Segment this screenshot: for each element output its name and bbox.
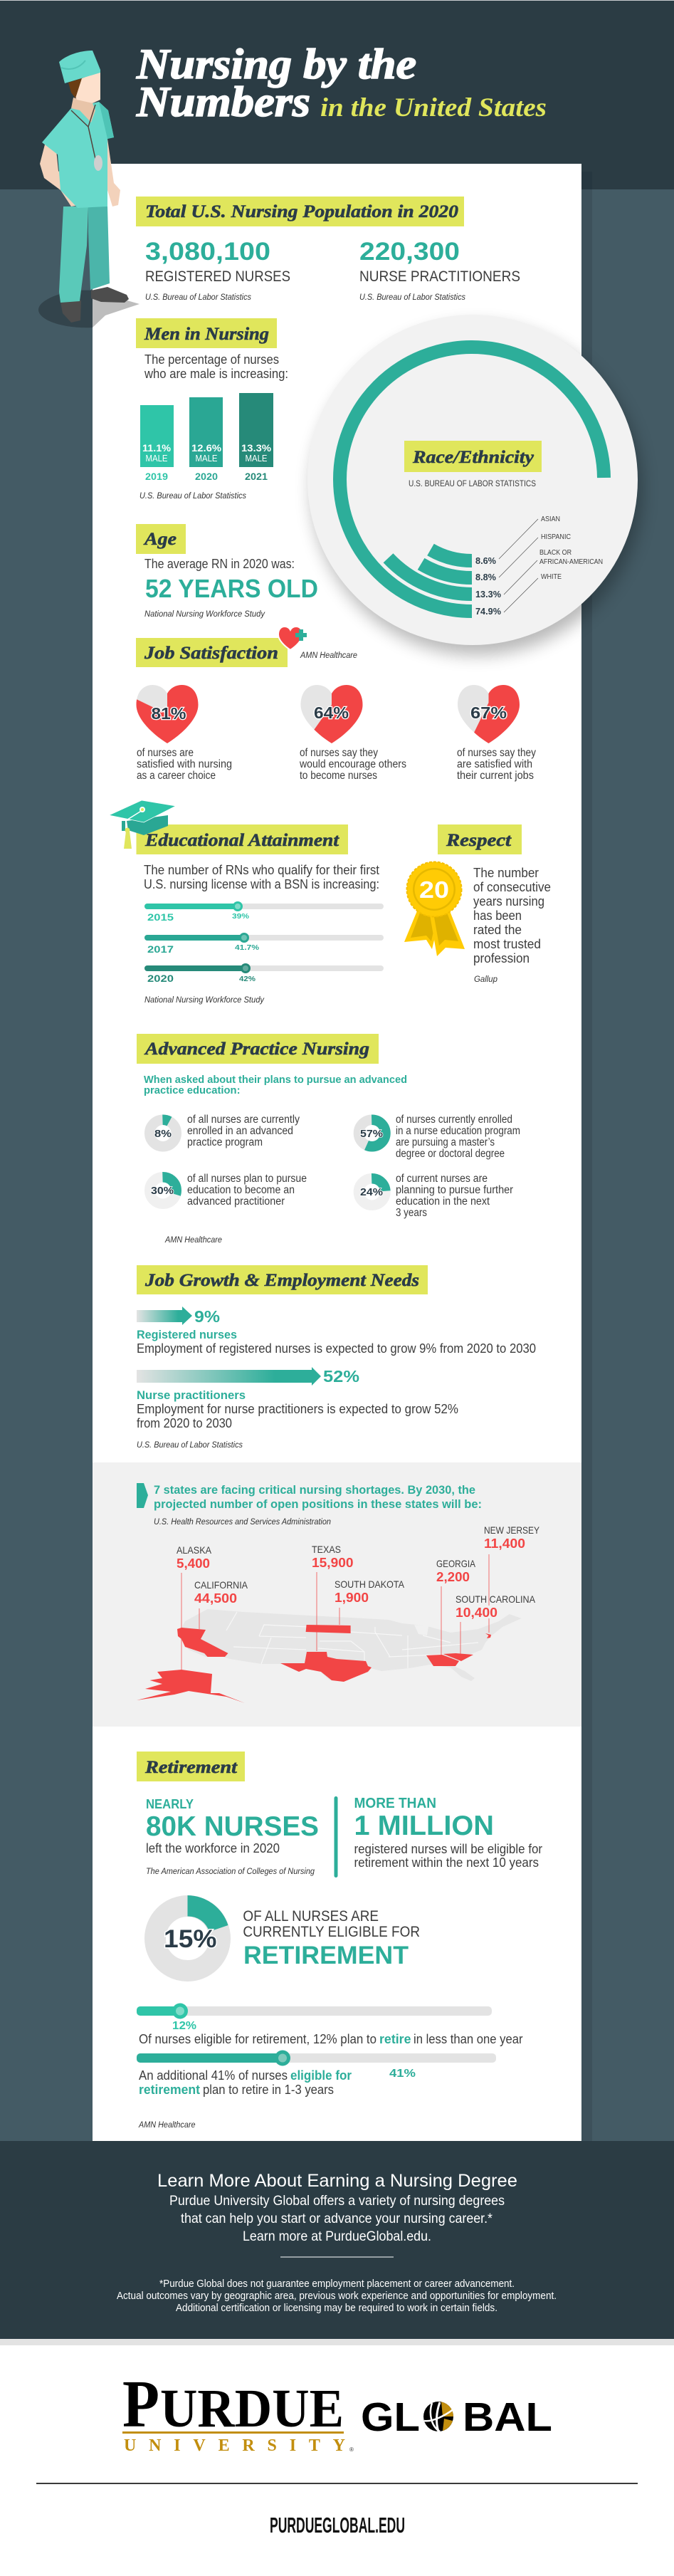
text: advanced practice intro: [144, 1074, 407, 1096]
text: eligible for retirement: RETIREMENT: [243, 1942, 409, 1969]
legend: ethnicity values and leaders: AFRICAN-AMERICAN: [539, 558, 603, 566]
section: state shortages map: [93, 1462, 581, 1727]
text: website url: PURDUEGLOBAL.EDU: [270, 2513, 405, 2538]
bar chart: male share: 2021: [245, 471, 268, 482]
donut: 57 percent: degree or doctoral degree: [396, 1148, 505, 1160]
heading: retirement: Retirement: [144, 1758, 238, 1777]
map: United States: [137, 1554, 522, 1703]
stat: registered nurses: 3,080,100: [145, 238, 270, 266]
source: shortages: U.S. Health Resources and Services Administration: [154, 1518, 331, 1527]
text: male percentage intro: who are male is increasing:: [144, 367, 288, 381]
labels: state values: TEXAS: [312, 1544, 341, 1555]
donut: 24 percent: [359, 1173, 513, 1219]
donut: 15 percent eligible: 15%: [164, 1925, 216, 1953]
heading: job growth: [137, 1265, 428, 1294]
text: shortage intro: [154, 1484, 482, 1511]
icon: nurse illustration: [38, 51, 139, 328]
arrow: 52 percent growth: 52%: [323, 1367, 359, 1386]
labels: state values: [177, 1524, 540, 1620]
bar chart: male share: MALE: [145, 454, 168, 464]
donut: 30 percent: education to become an: [187, 1184, 295, 1196]
stat: nurse practitioners: NURSE PRACTITIONERS: [359, 268, 520, 285]
logo: Purdue Global: GL: [361, 2394, 420, 2440]
labels: state values: SOUTH CAROLINA: [456, 1593, 536, 1605]
text: trusted profession: most trusted: [473, 937, 541, 951]
progress bar: 41 percent: 41%: [389, 2068, 416, 2080]
donut: 8 percent: [149, 1114, 300, 1148]
text: advanced practice intro: When asked about their plans to pursue an advanced: [144, 1074, 407, 1086]
text: advanced practice intro: practice education:: [144, 1084, 241, 1096]
labels: state values: 11,400: [484, 1536, 525, 1551]
source: respect: Gallup: [474, 975, 498, 984]
labels: state values: 15,900: [312, 1556, 353, 1570]
title: [136, 41, 547, 125]
stat: 1 million: MORE THAN: [354, 1796, 436, 1811]
text: registered nurses growth: [137, 1329, 536, 1356]
progress bar: 2017: [144, 933, 384, 955]
stat: 80K nurses: NEARLY: [146, 1797, 194, 1811]
logo: Purdue Global: ®: [349, 2446, 354, 2453]
donut: 24 percent: planning to pursue further: [396, 1184, 513, 1196]
stat: heart 81 percent: 81%: [151, 704, 186, 723]
text: trusted profession: of consecutive: [473, 880, 551, 894]
icon: chevron: [137, 1483, 148, 1508]
text: 12 percent retire: [139, 2032, 523, 2046]
legend: ethnicity values and leaders: WHITE: [541, 573, 562, 581]
section: age: [136, 524, 318, 619]
text: eligible for retirement: OF ALL NURSES ARE: [243, 1908, 379, 1925]
state: Texas: [280, 1652, 372, 1682]
icon: globe letter: [423, 2402, 453, 2431]
stat: registered nurses: U.S. Bureau of Labor Statistics: [145, 293, 251, 302]
stat: registered nurses: REGISTERED NURSES: [145, 268, 290, 285]
text: eligible for retirement: [243, 1908, 420, 1969]
panel: footer call to action: [0, 2141, 674, 2345]
donut: 30 percent: [149, 1173, 307, 1208]
stat: heart 81 percent: as a career choice: [137, 770, 216, 782]
text: disclaimer: Actual outcomes vary by geographic area, previous work experience and opportunities for employment.: [117, 2290, 557, 2302]
heading: job satisfaction: Job Satisfaction: [144, 644, 278, 663]
legend: ethnicity values and leaders: 8.8%: [475, 572, 496, 582]
heading: job satisfaction: [136, 638, 288, 667]
icon: award ribbon: [404, 862, 465, 956]
text: 41 percent retire: plan to retire in 1-3 years: [203, 2083, 334, 2097]
text: average age: The average RN in 2020 was:: [144, 557, 295, 571]
source: race ethnicity: U.S. BUREAU OF LABOR STATISTICS: [409, 480, 536, 488]
text: BSN intro: The number of RNs who qualify for their first: [144, 863, 379, 877]
donut: 15 percent eligible: [155, 1895, 228, 1971]
text: trusted profession: rated the: [473, 923, 522, 937]
bar chart: male share: [140, 393, 273, 482]
donut: 8 percent: enrolled in an advanced: [187, 1125, 293, 1137]
donut: 30 percent: 30%: [151, 1185, 174, 1197]
donut: 57 percent: 57%: [360, 1128, 383, 1140]
text: trusted profession: profession: [473, 951, 530, 965]
arrow: 52 percent growth: [137, 1367, 359, 1386]
source: job growth: U.S. Bureau of Labor Statistics: [137, 1441, 243, 1450]
labels: state values: 5,400: [177, 1556, 210, 1571]
donut: 57 percent: of nurses currently enrolled: [396, 1114, 512, 1126]
stat: heart 64 percent: would encourage others: [299, 758, 406, 770]
stat: heart 64 percent: of nurses say they: [300, 747, 378, 759]
section: advanced practice nursing: [137, 1034, 520, 1245]
legend: ethnicity values and leaders: [475, 515, 603, 617]
progress bar: 2017: 2017: [147, 943, 174, 955]
stat: heart 67 percent: [457, 681, 536, 782]
state: New Jersey: [485, 1633, 491, 1638]
stat: 52 years old: 52 YEARS OLD: [145, 574, 318, 603]
text: degrees pitch: Purdue University Global offers a variety of nursing degrees: [169, 2194, 505, 2209]
panel: main white sheet: [93, 164, 581, 2141]
state: South Dakota: [306, 1625, 351, 1633]
section: total nursing population: [136, 197, 520, 302]
progress bar: 12 percent: 12%: [172, 2020, 196, 2032]
text: degrees pitch: [169, 2194, 505, 2244]
text: 41 percent retire: [139, 2068, 352, 2097]
logo: Purdue Global: [122, 2367, 552, 2455]
bar chart: male share: 2020: [195, 471, 218, 482]
text: eligible for retirement: CURRENTLY ELIGIBLE FOR: [243, 1924, 420, 1940]
donut: 8 percent: of all nurses are currently: [187, 1114, 300, 1126]
heading: learn more: Learn More About Earning a Nursing Degree: [157, 2171, 517, 2191]
text: shortage intro: 7 states are facing critical nursing shortages. By 2030, the: [154, 1484, 475, 1497]
stat: heart 64 percent: to become nurses: [300, 770, 377, 782]
bar chart: male share: MALE: [245, 454, 268, 464]
text: disclaimer: [117, 2278, 557, 2314]
stat: heart 67 percent: are satisfied with: [457, 758, 532, 770]
bar chart: male share: 11.1%: [142, 442, 172, 454]
text: trusted profession: The number: [473, 866, 539, 880]
stat: nurse practitioners: U.S. Bureau of Labor Statistics: [359, 293, 465, 302]
labels: state values: CALIFORNIA: [194, 1579, 248, 1591]
bar chart: male share: 12.6%: [191, 442, 222, 454]
stat: 80K nurses: left the workforce in 2020: [146, 1841, 280, 1855]
heading: respect: Respect: [446, 831, 512, 850]
progress bar: 2015: 2015: [147, 911, 174, 923]
heading: educational attainment: Educational Attainment: [144, 831, 339, 850]
donut: 30 percent: of all nurses plan to pursue: [187, 1173, 307, 1185]
donut: 8 percent: 8%: [154, 1128, 172, 1140]
state: South Carolina: [443, 1653, 473, 1661]
heading: advanced practice nursing: Advanced Practice Nursing: [144, 1040, 369, 1059]
stat: 80K nurses: [146, 1797, 319, 1876]
section: job satisfaction: [130, 627, 536, 782]
stat: heart 81 percent: satisfied with nursing: [137, 758, 232, 770]
leader lines: [181, 1554, 489, 1670]
text: 12 percent retire: Of nurses eligible for retirement, 12% plan to: [139, 2032, 377, 2046]
bar chart: male share: 2019: [145, 471, 168, 482]
legend: ethnicity values and leaders: 74.9%: [475, 607, 501, 617]
text: registered nurses growth: Employment of registered nurses is expected to grow 9% from 2020 to 2030: [137, 1341, 536, 1356]
text: 12 percent retire: in less than one year: [414, 2032, 523, 2046]
progress bar: 2017: 41.7%: [235, 943, 260, 952]
logo: Purdue Global: P: [122, 2367, 159, 2441]
logo: Purdue Global: BAL: [463, 2394, 552, 2440]
text: disclaimer: Additional certification or licensing may be required to work in certain fields.: [176, 2303, 497, 2314]
stat: 1 million: retirement within the next 10 years: [354, 1855, 539, 1870]
progress bar: 2020: 42%: [239, 975, 256, 983]
heading: race ethnicity: [404, 441, 542, 472]
text: degrees pitch: that can help you start or advance your nursing career.*: [181, 2211, 493, 2226]
text: trusted profession: years nursing: [473, 894, 544, 909]
title: in the United States: [320, 93, 547, 122]
source: job satisfaction: AMN Healthcare: [300, 651, 357, 660]
stat: heart 64 percent: 64%: [314, 703, 349, 722]
donut: 30 percent: advanced practitioner: [187, 1195, 285, 1208]
donut: 24 percent: 3 years: [396, 1207, 427, 1219]
source: advanced practice: AMN Healthcare: [164, 1236, 222, 1245]
logo: Purdue Global: UNIVERSITY: [124, 2436, 345, 2455]
bar chart: male share: 13.3%: [241, 442, 272, 454]
labels: state values: 1,900: [335, 1591, 369, 1605]
stat: heart 81 percent: of nurses are: [137, 747, 194, 759]
stat: 1 million: 1 MILLION: [354, 1811, 494, 1841]
state: California: [177, 1628, 228, 1657]
stat: heart 67 percent: of nurses say they: [457, 747, 536, 759]
stat: 80K nurses: 80K NURSES: [146, 1811, 319, 1842]
section: respect: [404, 824, 551, 984]
heading: age: [136, 524, 186, 554]
stat: 1 million: registered nurses will be eligible for: [354, 1842, 542, 1856]
text: 41 percent retire: eligible for: [290, 2068, 352, 2083]
text: trusted profession: [473, 866, 551, 965]
stat: heart 67 percent: their current jobs: [457, 770, 534, 782]
legend: ethnicity values and leaders: ASIAN: [541, 515, 560, 523]
text: disclaimer: *Purdue Global does not guarantee employment placement or career advancement.: [159, 2278, 515, 2290]
heading: race ethnicity: Race/Ethnicity: [412, 448, 535, 467]
labels: state values: 44,500: [194, 1591, 237, 1606]
stat: heart 67 percent: 67%: [470, 703, 507, 722]
labels: state values: SOUTH DAKOTA: [335, 1578, 405, 1590]
logo: Purdue Global: URDUE: [160, 2379, 344, 2439]
progress bar: 2015: 39%: [232, 912, 250, 921]
icon: heart with plus: [278, 627, 307, 650]
state: Georgia: [426, 1655, 459, 1666]
heading: total population: [136, 197, 464, 226]
heading: job growth: Job Growth & Employment Needs: [144, 1271, 419, 1290]
labels: state values: 10,400: [456, 1606, 497, 1620]
arrow: 9 percent growth: [137, 1307, 220, 1326]
text: BSN intro: [144, 863, 379, 891]
title: Numbers: [136, 78, 310, 125]
text: shortage intro: projected number of open positions in these states will be:: [154, 1498, 482, 1511]
heading: respect: [438, 824, 522, 854]
progress bar: 2020: 2020: [147, 973, 174, 984]
donut: 57 percent: [359, 1114, 520, 1160]
text: nurse practitioners growth: Employment for nurse practitioners is expected to grow 52%: [137, 1402, 458, 1416]
icon: award ribbon: 20: [419, 876, 449, 903]
legend: ethnicity values and leaders: 13.3%: [475, 590, 501, 600]
section: job growth: [137, 1265, 536, 1450]
section: race and ethnicity circle: [307, 315, 642, 655]
stat: registered nurses: [145, 238, 290, 302]
source: retirement: AMN Healthcare: [138, 2121, 195, 2130]
heading: age: Age: [143, 530, 177, 549]
source: education: National Nursing Workforce Study: [144, 996, 265, 1005]
donut: 57 percent: in a nurse education program: [396, 1125, 520, 1137]
legend: ethnicity values and leaders: BLACK OR: [539, 549, 572, 557]
text: 41 percent retire: retirement: [139, 2083, 200, 2097]
source: age: National Nursing Workforce Study: [144, 610, 265, 619]
text: nurse practitioners growth: from 2020 to 2030: [137, 1416, 232, 1430]
donut: 24 percent: 24%: [360, 1186, 383, 1198]
icon: graduation cap: [109, 800, 176, 849]
source: men in nursing: U.S. Bureau of Labor Statistics: [139, 492, 246, 501]
heading: educational attainment: [137, 824, 348, 854]
stat: 80K nurses: The American Association of Colleges of Nursing: [146, 1868, 315, 1876]
arrow: 9 percent growth: 9%: [194, 1307, 220, 1326]
text: male percentage intro: [144, 352, 288, 381]
progress bar: 12 percent: [137, 2004, 492, 2032]
text: trusted profession: has been: [473, 909, 522, 923]
progress bar: 2015: [144, 901, 384, 923]
heading: men in nursing: Men in Nursing: [144, 325, 269, 344]
section: men in nursing: [136, 318, 288, 501]
text: nurse practitioners growth: [137, 1389, 458, 1430]
stat: nurse practitioners: [359, 238, 520, 302]
progress bar: 2020: [144, 963, 384, 984]
donut: 57 percent: are pursuing a master’s: [396, 1136, 495, 1148]
state: Alaska: [137, 1670, 245, 1703]
stat: heart 81 percent: [137, 685, 232, 779]
heading: men in nursing: [136, 318, 277, 348]
stat: heart 64 percent: [299, 681, 406, 782]
bar chart: male share: MALE: [195, 454, 218, 464]
labels: state values: GEORGIA: [436, 1558, 476, 1569]
text: 41 percent retire: An additional 41% of nurses: [139, 2068, 288, 2083]
labels: state values: 2,200: [436, 1570, 470, 1584]
labels: state values: NEW JERSEY: [484, 1524, 540, 1536]
text: BSN intro: U.S. nursing license with a BSN is increasing:: [144, 877, 379, 891]
stat: 1 million: [354, 1796, 542, 1870]
legend: ethnicity values and leaders: 8.6%: [475, 556, 496, 566]
text: registered nurses growth: Registered nurses: [137, 1329, 237, 1341]
donut: 8 percent: practice program: [187, 1136, 263, 1148]
heading: total population: Total U.S. Nursing Population in 2020: [145, 202, 459, 221]
text: degrees pitch: Learn more at PurdueGlobal.edu.: [243, 2229, 431, 2244]
section: educational attainment: [109, 800, 384, 1005]
labels: state values: ALASKA: [177, 1544, 212, 1556]
chart: radial ethnicity bars: [340, 347, 604, 611]
section: retirement: [137, 1752, 542, 2130]
heading: advanced practice nursing: [137, 1034, 379, 1064]
donut: 24 percent: of current nurses are: [396, 1173, 488, 1185]
donut: 24 percent: education in the next: [396, 1195, 490, 1208]
progress bar: 41 percent: [137, 2051, 496, 2080]
title: Nursing by the: [136, 41, 416, 88]
text: male percentage intro: The percentage of nurses: [144, 352, 279, 367]
stat: nurse practitioners: 220,300: [359, 238, 460, 266]
text: nurse practitioners growth: Nurse practitioners: [137, 1389, 246, 1402]
text: 12 percent retire: retire: [379, 2032, 411, 2046]
legend: ethnicity values and leaders: HISPANIC: [541, 533, 571, 541]
heading: retirement: [137, 1752, 245, 1781]
